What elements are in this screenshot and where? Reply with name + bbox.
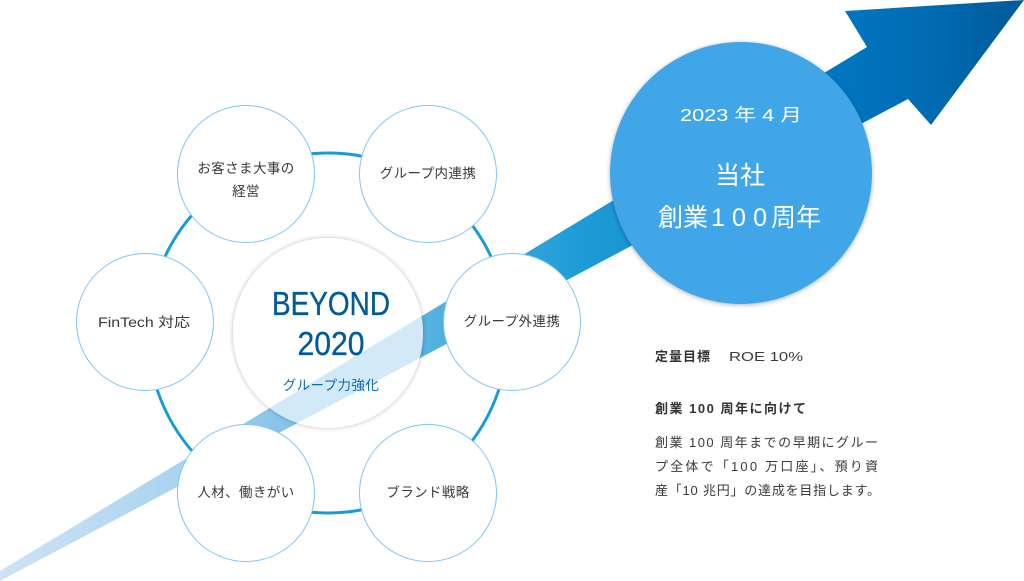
node: brand strategy: ブランド戦略 xyxy=(386,484,470,500)
text body xyxy=(655,435,880,498)
center heading xyxy=(272,285,390,362)
node: FinTech xyxy=(76,254,214,390)
center subheading: グループ力強化 xyxy=(283,378,379,393)
milestone title xyxy=(658,162,821,232)
milestone title: 当社 xyxy=(715,162,765,190)
node: customer first: お客さま大事の xyxy=(197,160,295,176)
node: external collaboration: グループ外連携 xyxy=(464,314,560,329)
target ROE: ROE 10% xyxy=(729,349,804,364)
node: group collaboration xyxy=(360,106,496,242)
node: FinTech: FinTech 対応 xyxy=(98,315,191,330)
ring connecting the initiatives xyxy=(148,153,508,513)
node: brand strategy xyxy=(360,424,496,562)
center heading: 2020 xyxy=(298,325,364,362)
text body: 産「10 兆円」の達成を目指します。 xyxy=(655,483,880,498)
text block: toward 100th anniversary xyxy=(655,401,880,498)
milestone title: 周年 xyxy=(771,204,821,232)
node: external collaboration xyxy=(444,254,580,390)
node: customer first xyxy=(178,106,314,242)
node: group collaboration: グループ内連携 xyxy=(380,166,476,181)
node: people: 人材、働きがい xyxy=(197,485,295,500)
node: customer first: 経営 xyxy=(232,184,260,199)
text heading: 創業 100 周年に向けて xyxy=(655,401,806,416)
arrow band seen through the disc xyxy=(270,316,423,423)
center circle disc xyxy=(233,238,423,428)
center heading: BEYOND xyxy=(272,285,390,322)
center circle: BEYOND 2020 xyxy=(230,236,426,430)
node: people xyxy=(178,424,314,562)
milestone circle: 100th anniversary xyxy=(610,42,872,304)
text body: プ全体で「100 万口座」、預り資 xyxy=(655,459,878,474)
milestone date: 2023 年 4 月 xyxy=(680,105,802,125)
milestone title: 創業 xyxy=(658,204,708,232)
target ROE: 定量目標 xyxy=(655,349,710,364)
target ROE xyxy=(655,349,804,364)
text body: 創業 100 周年までの早期にグルー xyxy=(655,435,878,450)
milestone disc xyxy=(610,42,872,304)
milestone title: 100 xyxy=(711,204,767,232)
